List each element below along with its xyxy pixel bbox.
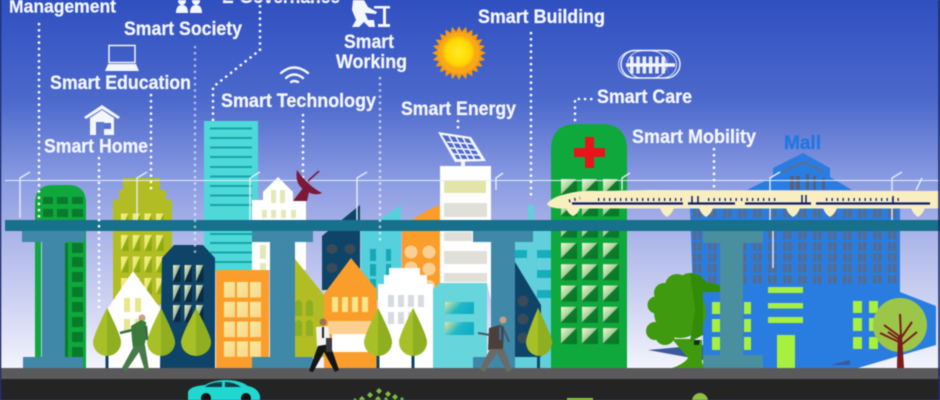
- bullet train: [547, 190, 940, 217]
- building: orange slanted tower: [402, 205, 440, 300]
- overhead wire and poles: [5, 172, 940, 268]
- label: Smart Technology: Smart Technology: [221, 91, 376, 112]
- label: Smart Working: [336, 32, 407, 73]
- mall tower: [690, 153, 900, 295]
- tree: fifth teardrop: [399, 308, 427, 368]
- label: Mall: Mall: [784, 133, 821, 154]
- building: white tower with solar panel: [440, 166, 491, 300]
- building: teal tower: [204, 121, 258, 271]
- tree: small round with branches: [873, 298, 927, 368]
- label: Smart Mobility: Smart Mobility: [632, 127, 756, 148]
- person: walking man in brown jacket: [478, 316, 512, 372]
- green object on road: [567, 398, 593, 400]
- label: Smart Society: Smart Society: [124, 19, 242, 40]
- label: Smart Energy: Smart Energy: [401, 99, 516, 120]
- label: Smart Building: Smart Building: [478, 7, 605, 28]
- tree: third teardrop: [181, 308, 211, 356]
- tree: left teardrop: [93, 308, 121, 368]
- label: Smart Home: Smart Home: [44, 136, 148, 158]
- icon: solar panel: [438, 132, 486, 167]
- tree: large green: [646, 273, 720, 368]
- building: cyan right block: [515, 205, 551, 368]
- label: Smart Care: Smart Care: [597, 87, 692, 108]
- person: walking man in white shirt: [309, 318, 339, 372]
- car: [188, 380, 260, 400]
- icon: house: [84, 105, 120, 135]
- building: light blue block: [433, 283, 487, 368]
- label: Smart Education: Smart Education: [50, 73, 191, 94]
- building: orange block: [216, 270, 269, 368]
- elevated rail deck and pillars: [5, 220, 940, 368]
- icon: people: [176, 0, 202, 13]
- icon: heartbeat care emblem: [618, 50, 680, 78]
- icon: worker at desk: [352, 0, 390, 27]
- road: [0, 379, 940, 400]
- tree: fourth teardrop: [364, 308, 392, 368]
- building: olive tower: [113, 178, 172, 305]
- icon: wifi: [281, 68, 308, 82]
- building: white house left: [108, 271, 160, 368]
- building: navy tower: [160, 245, 215, 368]
- building: orange house: [324, 258, 377, 368]
- building: white gabled block: [252, 177, 306, 270]
- icon: laptop: [105, 46, 139, 71]
- label: Smart Working: Smart: [344, 32, 395, 53]
- icon: satellite dish: [293, 170, 322, 201]
- building: navy slanted tower: [322, 205, 360, 290]
- building: olive gable: [295, 259, 324, 357]
- tree: second teardrop: [147, 308, 175, 356]
- icon: sun: [432, 26, 486, 80]
- building: white stepped block: [378, 268, 433, 368]
- icon: red cross: [574, 137, 605, 168]
- dotted connector lines: [39, 0, 714, 313]
- building: green hospital: [551, 124, 627, 368]
- building: cyan slanted tower: [361, 205, 401, 300]
- label: Smart Working: Working: [336, 52, 407, 73]
- tree top on road: [692, 393, 708, 400]
- plant on road: [353, 388, 404, 400]
- person: walking man in green: [120, 314, 149, 371]
- pavement: [0, 368, 940, 379]
- tree: sixth teardrop: [526, 308, 552, 368]
- building: left green tower: [35, 185, 86, 368]
- mall lower building: [648, 287, 936, 368]
